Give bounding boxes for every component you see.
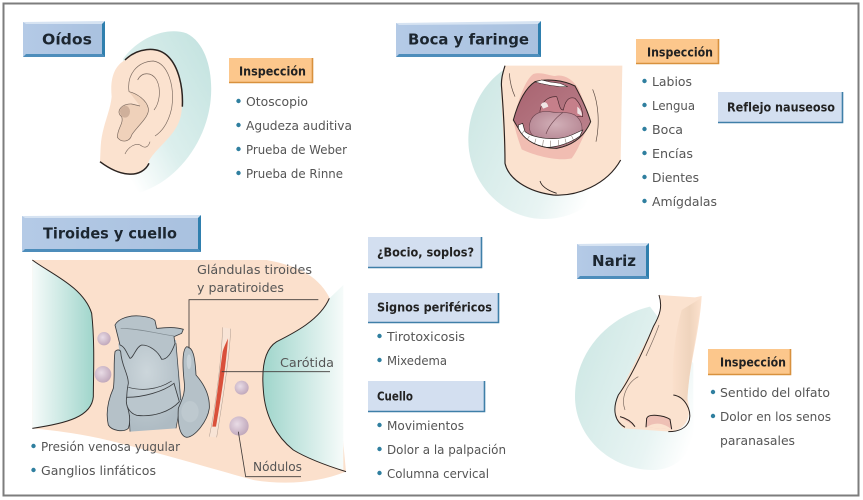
list: cuello: Ganglios linfáticos xyxy=(41,463,156,478)
list: inspección nariz: Dolor en los senos xyxy=(720,409,831,424)
list: cuello exploración xyxy=(377,418,506,481)
list: inspección nariz: paranasales xyxy=(720,433,795,448)
label: Signos periféricos xyxy=(368,293,499,323)
list: cuello xyxy=(31,439,181,478)
list: cuello exploración: Dolor a la palpación xyxy=(387,442,506,457)
label: Reflejo nauseoso xyxy=(718,92,843,123)
leader lines xyxy=(189,300,330,477)
label: Inspección xyxy=(636,39,719,64)
list: inspección boca: Encías xyxy=(652,146,693,161)
label: Inspección: Inspección xyxy=(239,64,306,78)
nodules xyxy=(95,332,249,436)
label: Cuello xyxy=(368,381,485,412)
label: Inspección: Inspección xyxy=(720,356,786,370)
list: inspección boca: Amígdalas xyxy=(652,194,717,209)
list: signos periféricos: Mixedema xyxy=(387,353,447,368)
label: Inspección xyxy=(708,349,791,375)
heading: Nariz xyxy=(577,243,649,279)
panel: Boca y faringe xyxy=(396,21,843,219)
carotid artery xyxy=(209,327,231,437)
icon: open mouth illustration xyxy=(468,66,622,219)
list: inspección boca: Boca xyxy=(652,122,683,137)
list: inspección boca: Dientes xyxy=(652,170,699,185)
heading: Nariz: Nariz xyxy=(592,252,636,270)
label: Inspección: Inspección xyxy=(647,46,713,60)
thyroid and larynx xyxy=(107,316,209,437)
illustration: neck and thyroid xyxy=(32,260,346,483)
heading: Boca y faringe: Boca y faringe xyxy=(408,30,529,48)
panel: Tiroides y cuello xyxy=(22,215,506,483)
panel: Nariz xyxy=(575,243,831,470)
label: Inspección xyxy=(229,58,313,83)
list: inspección oídos: Prueba de Weber xyxy=(246,142,348,157)
list: cuello exploración: Movimientos xyxy=(387,418,464,433)
list: inspección boca xyxy=(642,74,717,209)
label: ¿Bocio, soplos? xyxy=(368,237,482,268)
list: cuello: Presión venosa yugular xyxy=(41,439,181,454)
panel: Oídos xyxy=(23,21,352,193)
label: Glándulas tiroides y paratiroides: Glándulas tiroides xyxy=(197,262,312,277)
heading: Oídos xyxy=(23,21,105,57)
list: signos periféricos xyxy=(377,329,465,368)
list: inspección nariz xyxy=(711,385,831,448)
list: inspección oídos: Otoscopio xyxy=(246,94,308,109)
icon: ear illustration xyxy=(100,31,211,193)
label: Glándulas tiroides y paratiroides: y paratiroides xyxy=(197,280,284,295)
heading: Tiroides y cuello xyxy=(22,215,201,252)
list: cuello exploración: Columna cervical xyxy=(387,466,489,481)
heading: Boca y faringe xyxy=(396,21,541,57)
icon: nose illustration xyxy=(575,295,702,470)
label: Reflejo nauseoso: Reflejo nauseoso xyxy=(727,100,835,114)
list: signos periféricos: Tirotoxicosis xyxy=(386,329,465,344)
heading: Oídos: Oídos xyxy=(42,30,92,48)
label: Nódulos: Nódulos xyxy=(253,459,302,474)
label: Glándulas tiroides y paratiroides xyxy=(197,262,312,295)
label: Cuello: Cuello xyxy=(377,390,413,404)
list: inspección nariz: Sentido del olfato xyxy=(720,385,830,400)
label: Signos periféricos: Signos periféricos xyxy=(377,300,492,314)
list: inspección oídos: Agudeza auditiva xyxy=(246,118,352,133)
label: Carótida: Carótida xyxy=(280,355,334,370)
label: ¿Bocio, soplos?: ¿Bocio, soplos? xyxy=(377,246,474,260)
list: inspección boca: Labios xyxy=(652,74,692,89)
list: inspección oídos xyxy=(236,94,352,181)
list: inspección oídos: Prueba de Rinne xyxy=(246,166,343,181)
list: inspección boca: Lengua xyxy=(652,98,695,113)
heading: Tiroides y cuello: Tiroides y cuello xyxy=(43,224,177,242)
